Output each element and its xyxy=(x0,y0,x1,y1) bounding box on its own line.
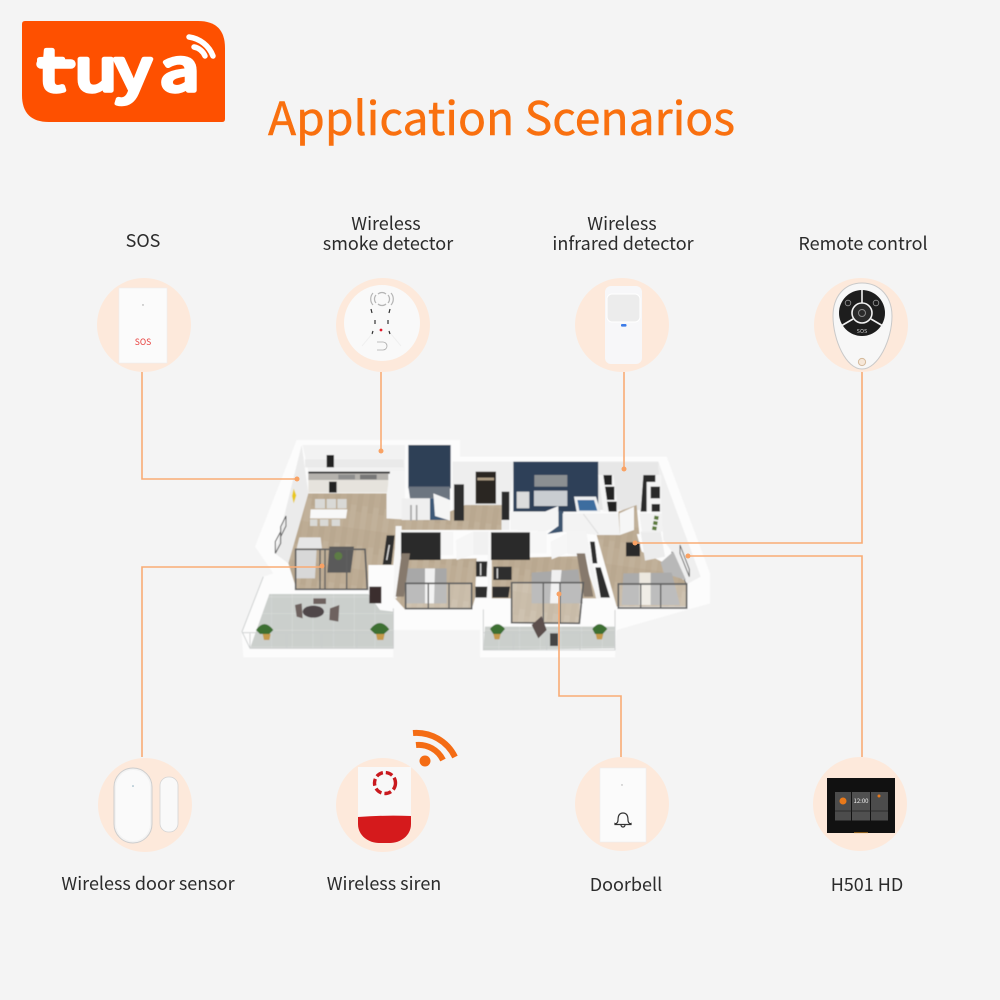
device: SOS button xyxy=(97,278,191,372)
connector: smoke detector xyxy=(378,372,384,454)
label: wireless infrared detector: Wireless xyxy=(587,210,657,236)
label: wireless smoke detector: smoke detector xyxy=(323,230,454,256)
dining set xyxy=(310,499,347,526)
label: wireless door sensor: Wireless door sensor xyxy=(61,870,236,896)
device: doorbell xyxy=(575,757,669,851)
label: H501 HD: H501 HD xyxy=(831,871,903,897)
label: wireless smoke detector: Wireless xyxy=(351,210,421,236)
connector: doorbell xyxy=(556,592,621,757)
logo: tuya: tuya xyxy=(38,23,200,108)
connector: door sensor xyxy=(142,564,324,757)
bedroom desks xyxy=(383,535,610,598)
closet room xyxy=(598,462,662,512)
plants xyxy=(256,623,607,634)
floor plan xyxy=(242,440,710,657)
bed one xyxy=(405,568,447,603)
label: SOS: SOS xyxy=(126,227,160,253)
connector: SOS xyxy=(142,372,300,482)
bed three xyxy=(622,573,680,605)
outer shell xyxy=(242,440,710,657)
hall wall and door xyxy=(453,462,513,512)
title: Application Scenarios xyxy=(268,83,735,149)
bathroom two xyxy=(513,462,598,512)
icon: wifi signal xyxy=(413,733,455,766)
living area furniture xyxy=(297,537,322,548)
left wall windows and sign xyxy=(275,516,286,553)
device: H501 HD panel xyxy=(813,757,907,851)
connector: H501 HD xyxy=(686,554,862,757)
kitchen cabinets xyxy=(305,459,404,467)
sliding doors xyxy=(296,549,367,589)
living corner xyxy=(641,532,665,561)
device: wireless siren xyxy=(336,758,430,852)
label: remote control: Remote control xyxy=(798,230,928,256)
wood floors xyxy=(288,493,502,590)
connector: infrared detector xyxy=(622,372,626,472)
connector: remote control xyxy=(632,372,862,546)
device: H501 HD panel: 12:00 xyxy=(854,796,869,805)
device: smoke detector xyxy=(336,278,430,372)
label: wireless siren: Wireless siren xyxy=(327,870,441,896)
balcony two xyxy=(483,627,615,650)
kitchen back wall xyxy=(303,445,405,472)
left wall xyxy=(275,445,308,563)
device: remote control xyxy=(814,278,908,372)
device: infrared detector xyxy=(575,278,669,372)
balcony one xyxy=(250,594,393,648)
device: door sensor xyxy=(98,758,192,852)
device: remote control: SOS xyxy=(857,327,868,335)
label: doorbell: Doorbell xyxy=(590,871,662,897)
bedroom partitions xyxy=(393,526,453,598)
label: wireless infrared detector: infrared detector xyxy=(552,230,695,256)
bed two xyxy=(532,569,583,603)
device: SOS button: SOS xyxy=(135,336,151,348)
bathroom one xyxy=(408,445,451,488)
logo: tuya xyxy=(22,21,225,122)
